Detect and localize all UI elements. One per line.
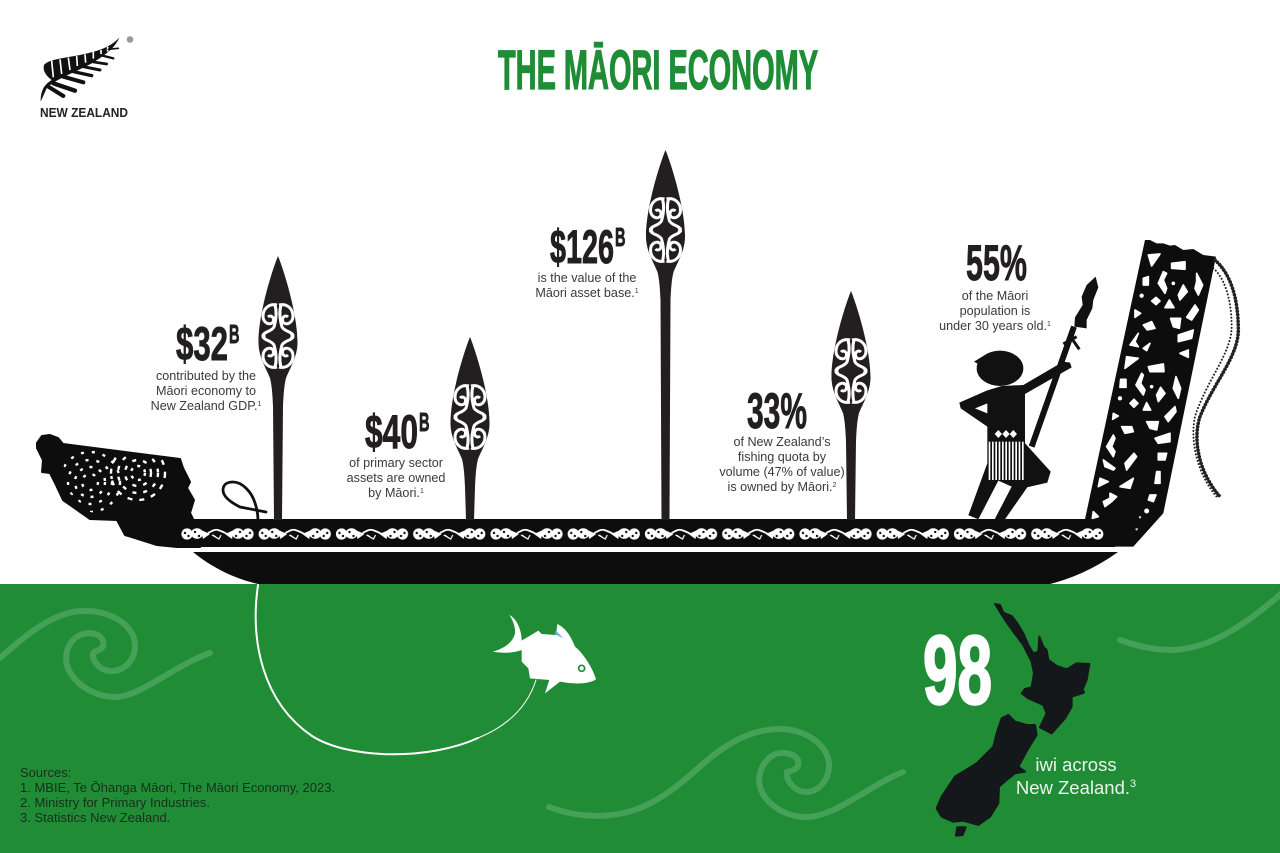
caption: is owned by Māori. bbox=[728, 480, 837, 494]
topknot bbox=[974, 354, 989, 372]
warrior figure with spear bbox=[959, 277, 1098, 524]
South Island bbox=[937, 715, 1037, 825]
number: $40 bbox=[365, 405, 418, 458]
caption: 2 bbox=[833, 482, 837, 489]
title: THE MĀORI ECONOMY bbox=[498, 38, 818, 101]
caption: by Māori. bbox=[368, 486, 424, 500]
skirt bbox=[988, 442, 1025, 480]
stern post bbox=[1085, 240, 1216, 547]
caption: Māori economy to bbox=[156, 384, 256, 398]
caption: volume (47% of value) bbox=[719, 465, 845, 479]
caption: contributed by the bbox=[156, 369, 256, 383]
logo: New Zealand fern bbox=[40, 36, 133, 120]
caption: New Zealand GDP. bbox=[151, 399, 261, 413]
registered mark bbox=[127, 36, 133, 43]
deck band bbox=[170, 519, 1115, 547]
logo text: NEW ZEALAND bbox=[40, 105, 128, 120]
sources: 2. Ministry for Primary Industries. bbox=[20, 795, 210, 810]
fish bbox=[493, 615, 596, 693]
caption: 1 bbox=[420, 488, 424, 495]
number: B bbox=[229, 319, 240, 349]
paddle 3 bbox=[646, 150, 685, 520]
number: 55% bbox=[966, 235, 1027, 291]
caption: Māori asset base. bbox=[535, 286, 639, 300]
stat: $40B bbox=[347, 405, 445, 500]
number: $32 bbox=[176, 317, 228, 370]
caption: of the Māori bbox=[962, 289, 1028, 303]
paddle 4 bbox=[831, 291, 871, 520]
body bbox=[959, 362, 1072, 524]
number: $126 bbox=[550, 220, 614, 273]
head bbox=[977, 351, 1023, 386]
sources: Sources: bbox=[20, 765, 71, 780]
sources: 3. Statistics New Zealand. bbox=[20, 810, 170, 825]
paddle 2 bbox=[450, 337, 490, 520]
number: B bbox=[615, 222, 626, 252]
paddle 1 bbox=[258, 256, 298, 520]
caption: fishing quota by bbox=[738, 450, 827, 464]
caption: iwi across bbox=[1035, 754, 1117, 775]
number: B bbox=[419, 407, 430, 437]
caption: 1 bbox=[257, 401, 261, 408]
caption: of primary sector bbox=[349, 456, 443, 470]
caption: assets are owned bbox=[347, 471, 445, 485]
green sea background bbox=[0, 584, 1280, 853]
caption: 1 bbox=[1047, 321, 1051, 328]
sources: 1. MBIE, Te Ōhanga Māori, The Māori Economy, 2023. bbox=[20, 780, 335, 795]
belt diamonds bbox=[995, 430, 1017, 438]
stat: 55% bbox=[939, 235, 1051, 333]
stat: 33% bbox=[719, 383, 845, 494]
beads bbox=[1193, 260, 1238, 497]
decorative wave: left bbox=[0, 611, 210, 697]
decorative wave: right bbox=[1120, 592, 1280, 650]
stat: 98 iwi bbox=[923, 616, 1136, 798]
caption: 1 bbox=[635, 288, 639, 295]
caption: is the value of the bbox=[538, 271, 636, 285]
caption: of New Zealand’s bbox=[733, 435, 831, 449]
caption: New Zealand. bbox=[1016, 777, 1136, 798]
fishing line bbox=[256, 585, 536, 754]
rope loop bbox=[223, 482, 266, 520]
prow carving bbox=[37, 435, 200, 547]
caption: population is bbox=[960, 304, 1030, 318]
waka canoe bbox=[37, 240, 1238, 584]
hull bbox=[193, 552, 1118, 584]
icon: fern bbox=[41, 37, 119, 102]
number: 33% bbox=[747, 383, 807, 439]
map of New Zealand bbox=[937, 604, 1089, 836]
number: 98 bbox=[923, 616, 992, 724]
decorative wave: bottom centre bbox=[549, 729, 903, 817]
caption: under 30 years old. bbox=[939, 319, 1051, 333]
spear bbox=[1032, 277, 1098, 447]
Stewart Island bbox=[956, 827, 966, 836]
fin accent bbox=[555, 631, 563, 638]
eye bbox=[579, 665, 585, 671]
stat: $32B bbox=[151, 317, 261, 413]
stat: $126B bbox=[535, 220, 639, 300]
caption: 3 bbox=[1130, 778, 1136, 790]
North Island bbox=[995, 604, 1089, 733]
carved strip bbox=[181, 527, 1108, 541]
